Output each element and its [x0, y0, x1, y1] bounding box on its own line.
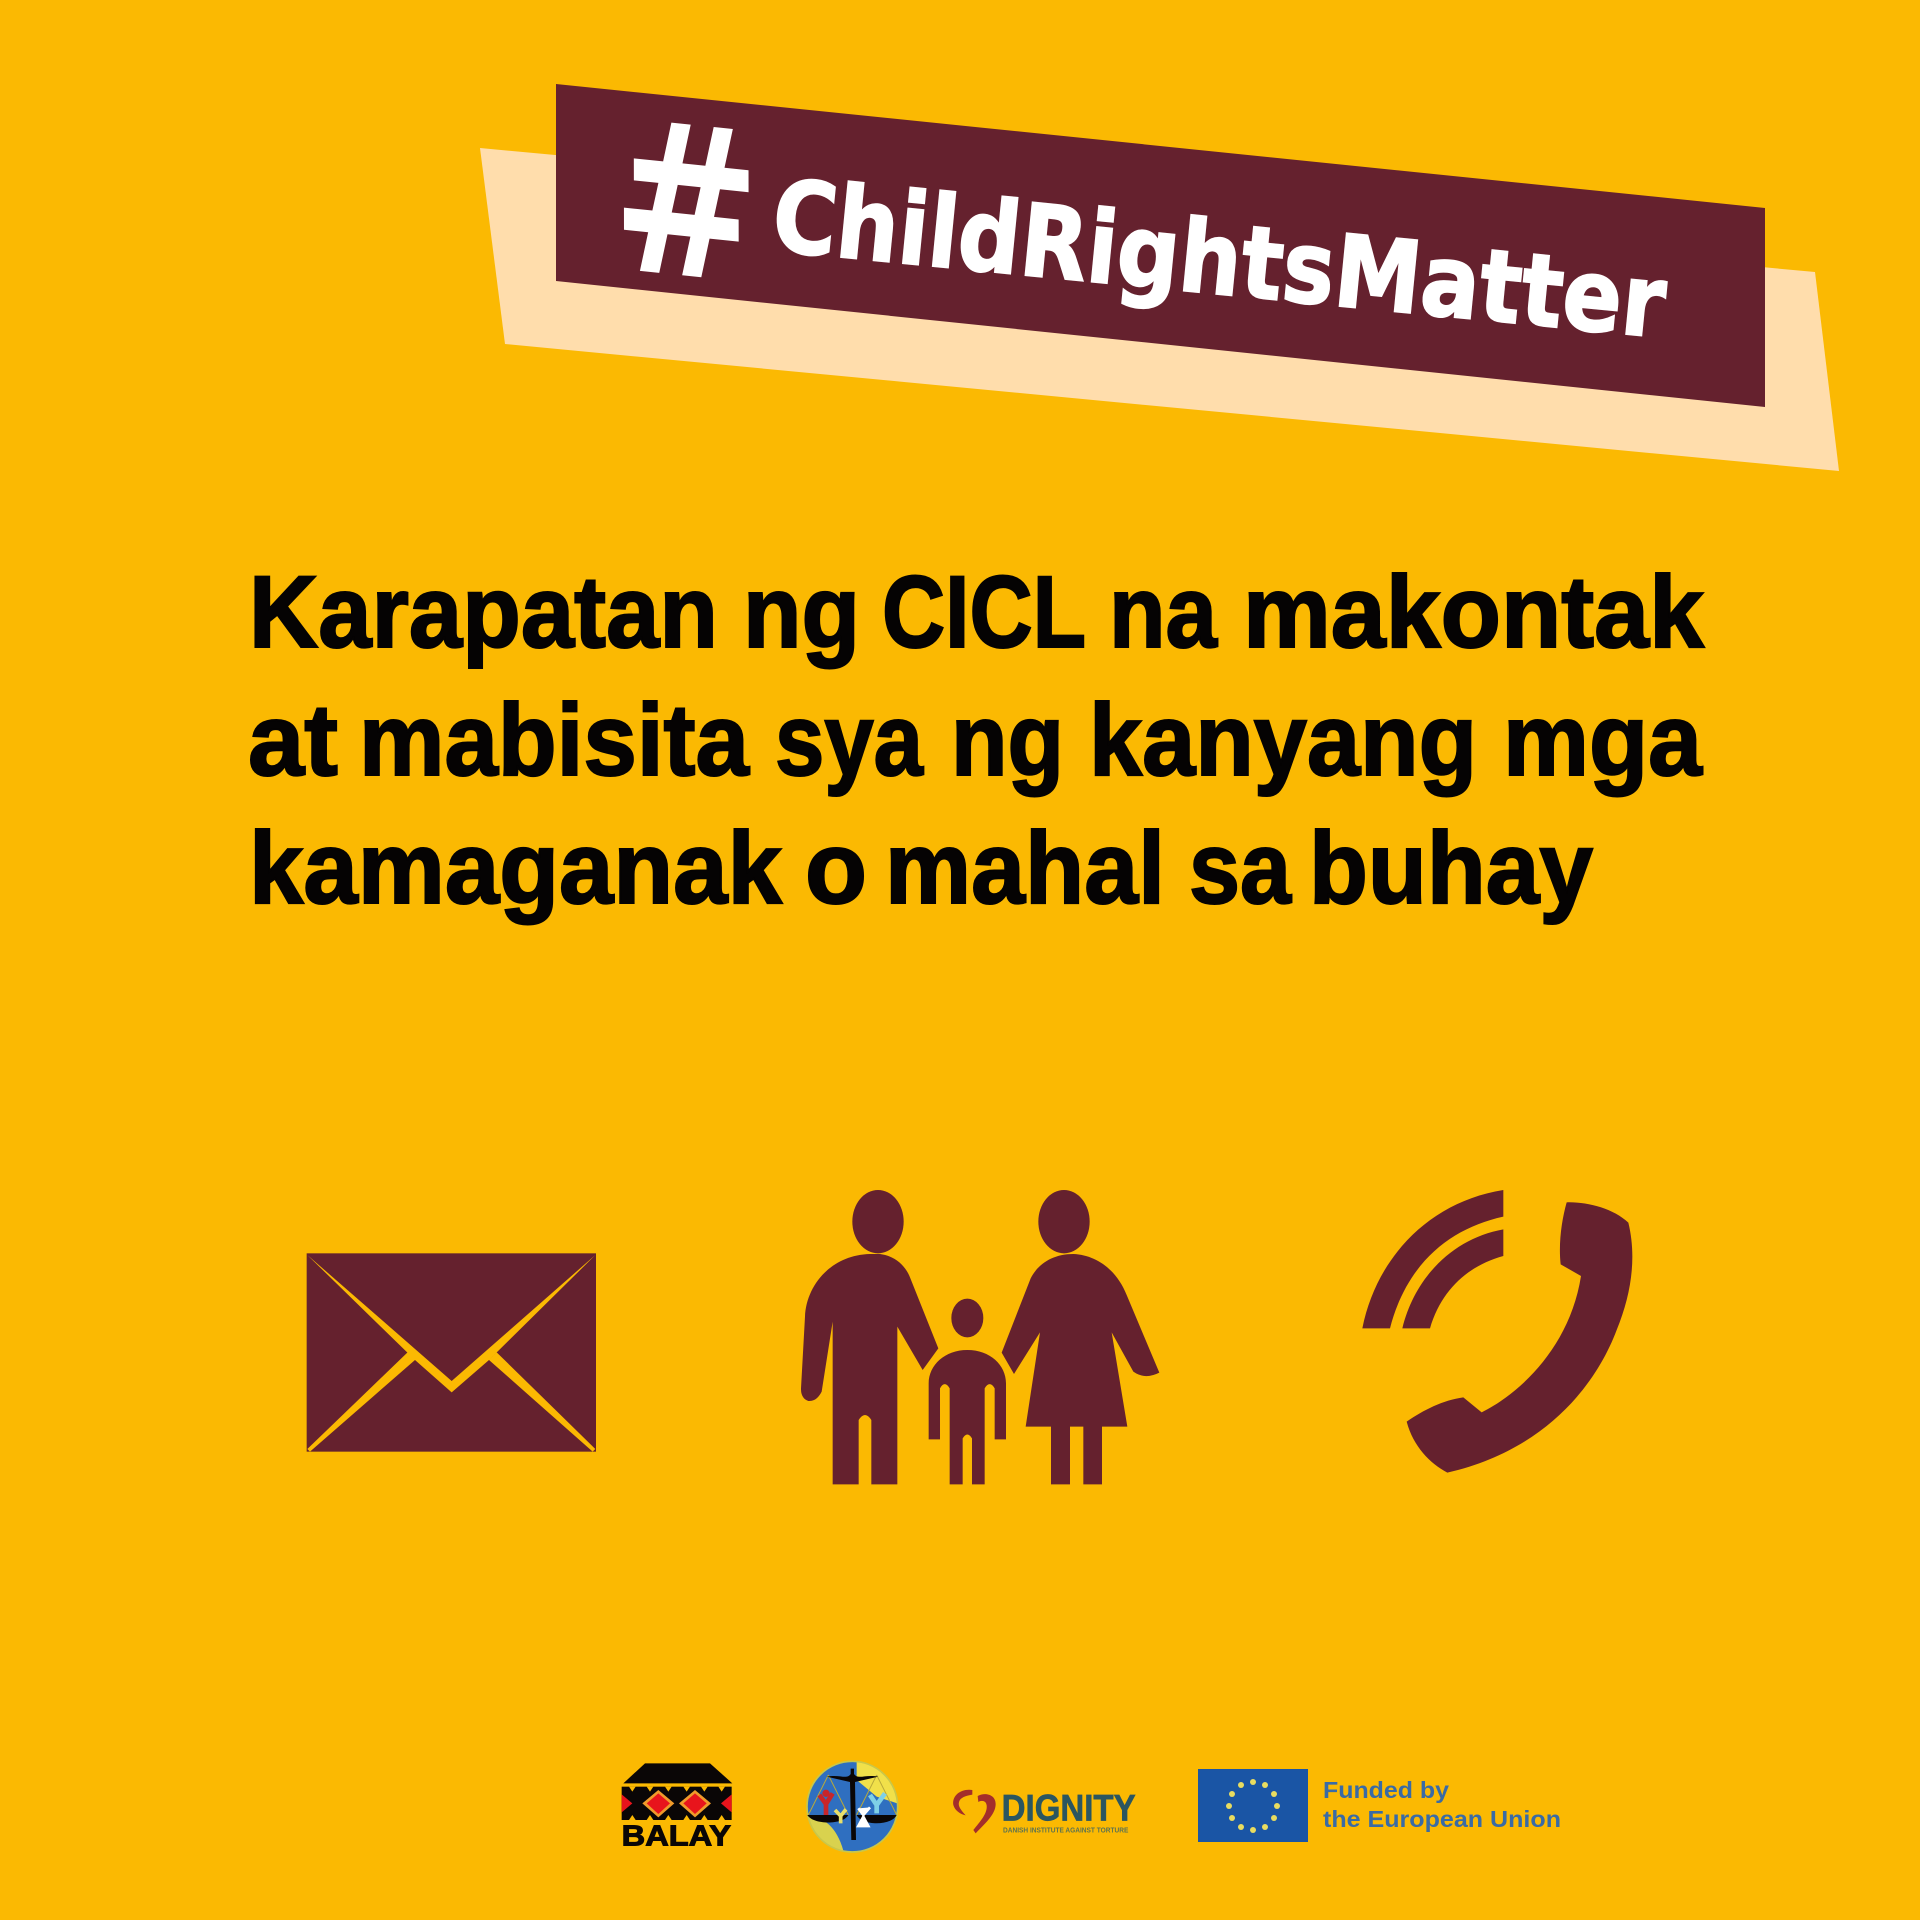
icon: family: [801, 1190, 1159, 1484]
headline line 3: o: [805, 811, 867, 925]
headline line 2: at: [248, 683, 338, 797]
banner: hashtag: [480, 74, 1839, 471]
headline line 1: CICL: [882, 555, 1086, 669]
headline line 3: kamaganak: [249, 811, 782, 925]
banner maroon strip: [556, 84, 1765, 407]
headline line 2: mga: [1503, 683, 1703, 797]
tagline: DANISH INSTITUTE AGAINST TORTURE: [1003, 1827, 1129, 1834]
headline line 1: ng: [743, 555, 860, 669]
headline line 3: mahal: [885, 811, 1165, 925]
father figure: [801, 1190, 938, 1484]
headline line 3: [249, 811, 1593, 925]
mother figure: [1002, 1190, 1159, 1484]
hashtag text: ChildRightsMatter: [768, 157, 1671, 361]
logo: justice globe: [807, 1761, 898, 1852]
EU flag: [1198, 1769, 1308, 1842]
headline line 2: mabisita: [359, 683, 750, 797]
headline line 3: buhay: [1309, 811, 1593, 925]
logo: BALAY: BALAY: [622, 1821, 731, 1853]
banner cream backing: [480, 148, 1839, 471]
icon: envelope: [307, 1253, 596, 1452]
headline line 2: ng: [951, 683, 1064, 797]
headline line 2: sya: [775, 683, 924, 797]
child figure: [929, 1299, 1006, 1484]
logo: DIGNITY: [953, 1787, 1136, 1834]
heart mark: [953, 1790, 996, 1833]
headline line 1: Karapatan: [249, 555, 718, 669]
headline line 1: [249, 555, 1704, 669]
icon: telephone: [1362, 1190, 1632, 1473]
hash symbol: #: [612, 74, 761, 334]
headline line 1: makontak: [1243, 555, 1704, 669]
headline line 2: kanyang: [1089, 683, 1477, 797]
headline: [248, 555, 1704, 925]
headline line 1: na: [1109, 555, 1218, 669]
logo: EU funding: [1198, 1769, 1561, 1842]
headline line 2: [248, 683, 1703, 797]
funding text: [1323, 1777, 1561, 1832]
wordmark: DIGNITY: [1002, 1787, 1136, 1829]
logo: BALAY: [622, 1763, 732, 1853]
headline line 3: sa: [1189, 811, 1292, 925]
funding text: the European Union: [1323, 1806, 1561, 1832]
funding text: Funded by: [1323, 1777, 1449, 1803]
